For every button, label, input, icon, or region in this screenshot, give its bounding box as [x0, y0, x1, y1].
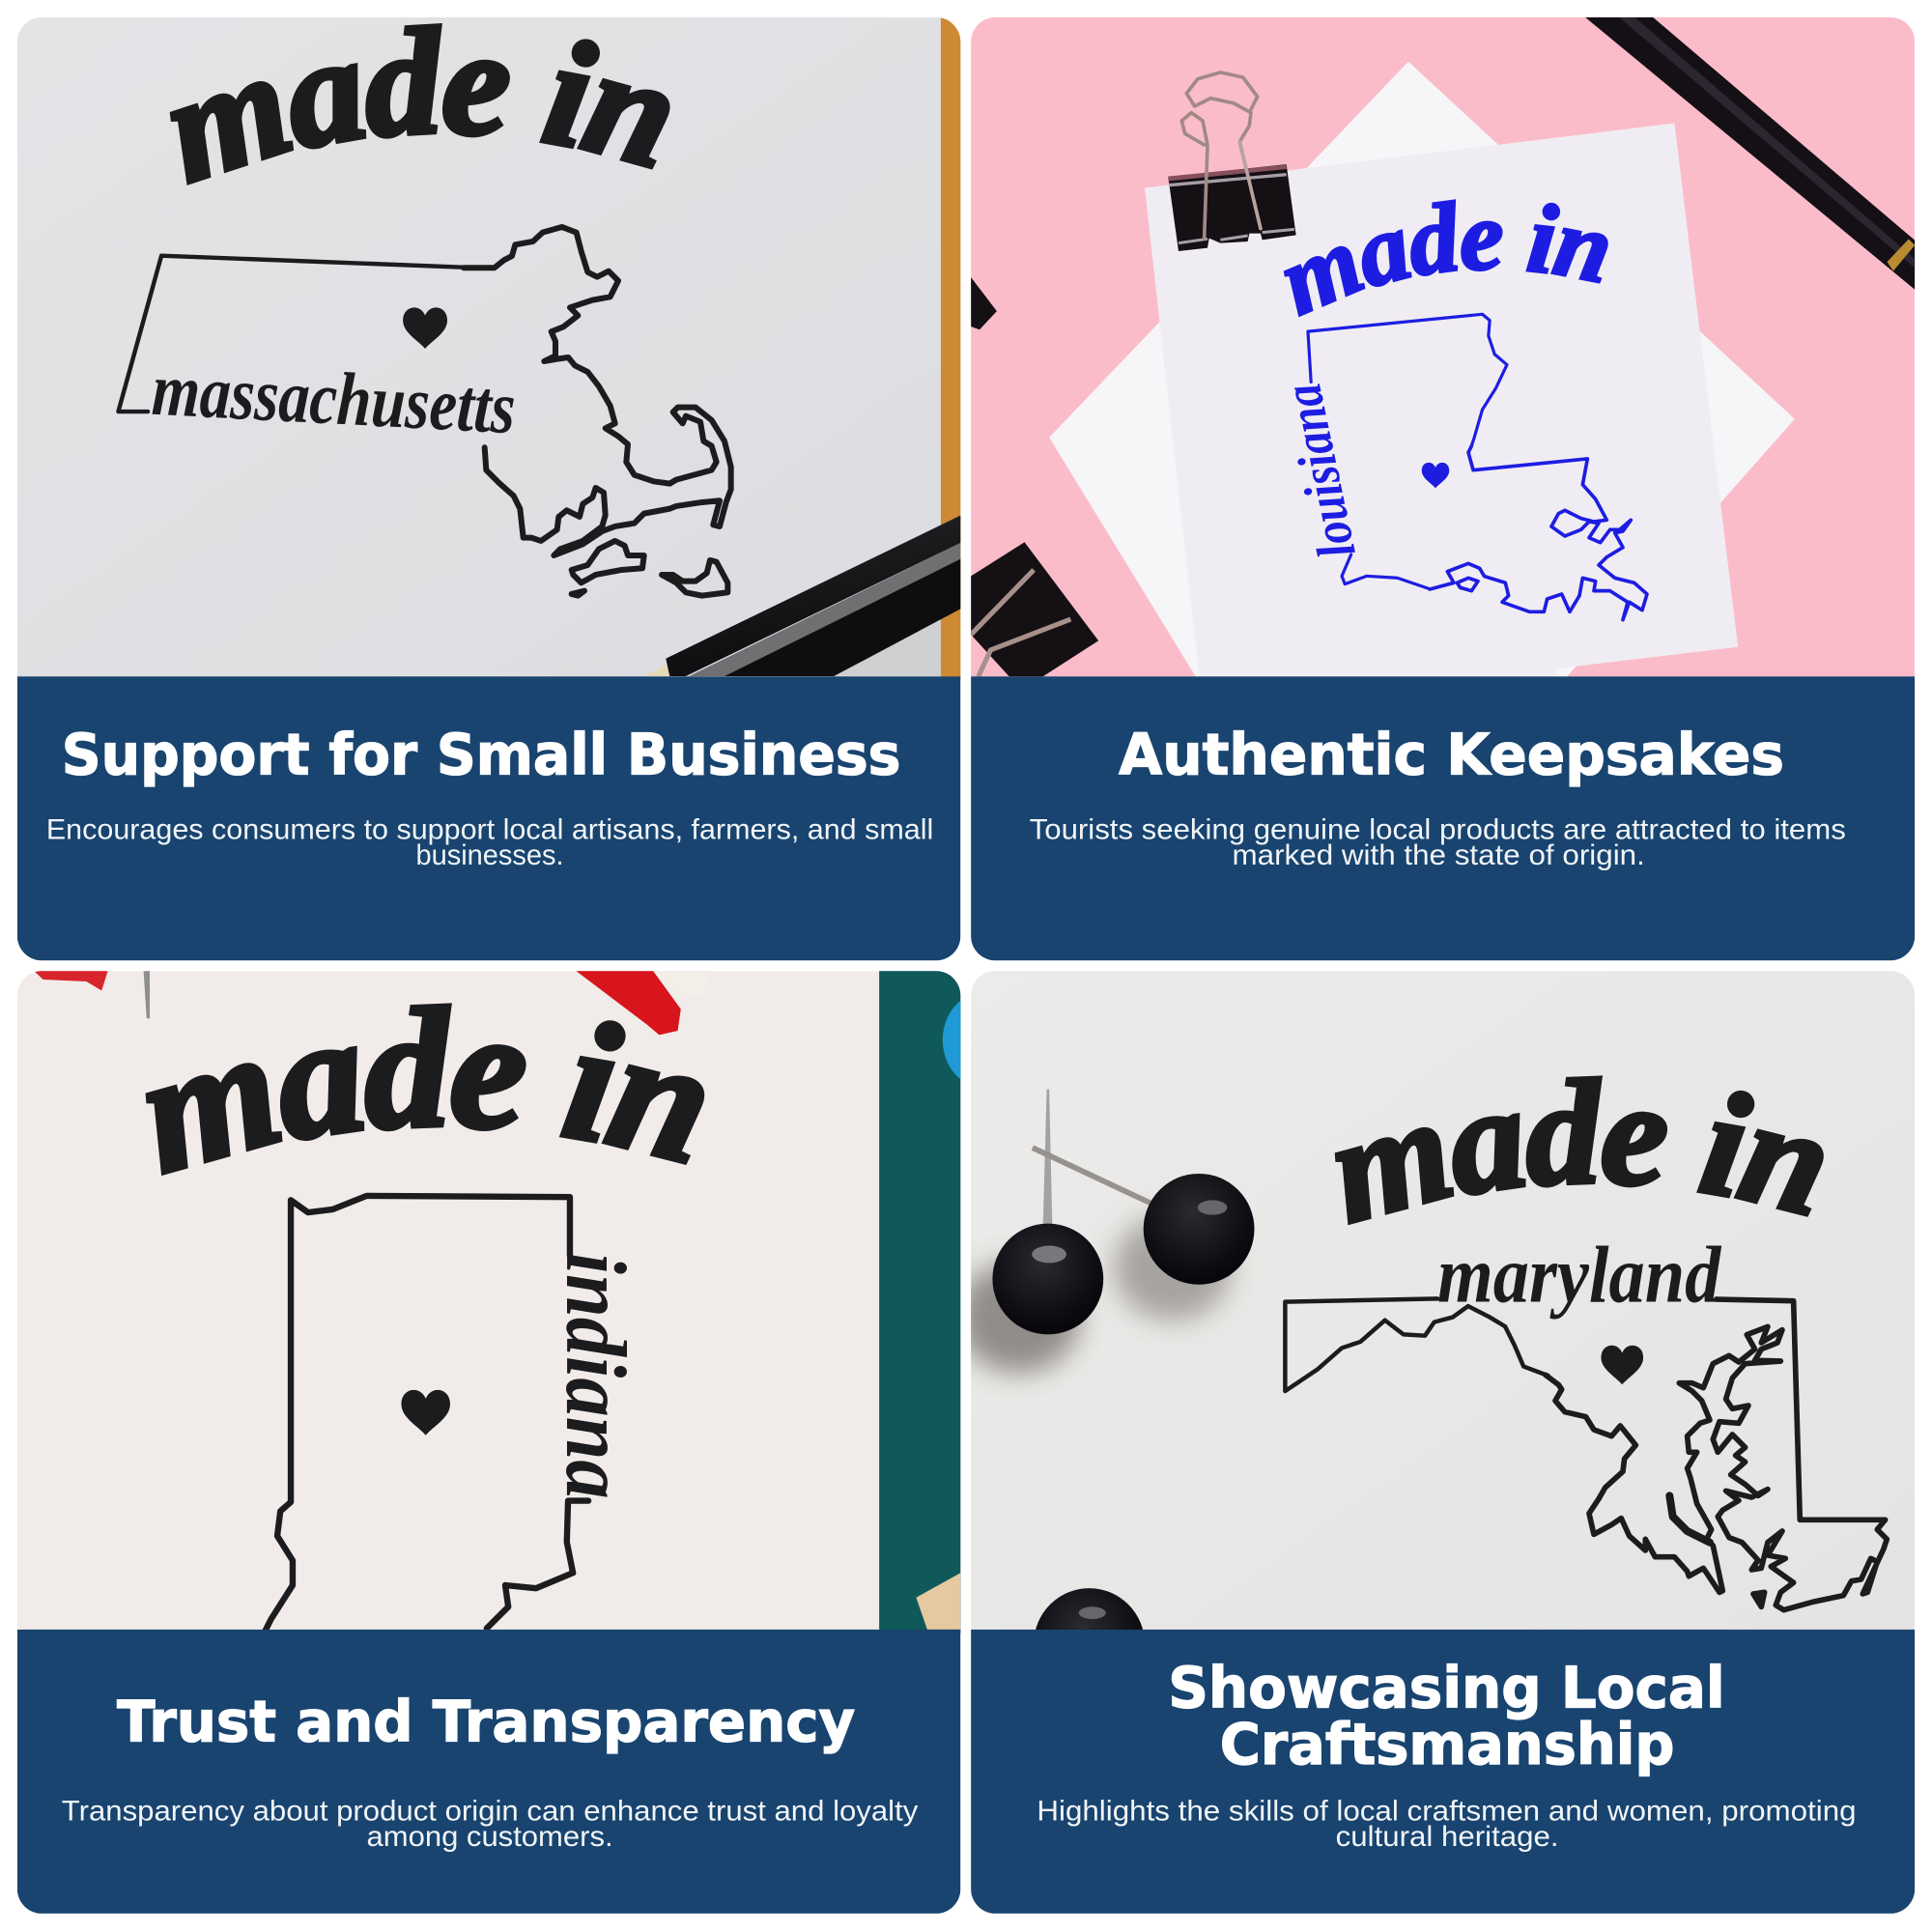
icon: heart: [1601, 1346, 1643, 1384]
description: Transparency about product origin can enhance trust and loyalty: [62, 1796, 919, 1828]
map: massachusetts outline: [118, 227, 731, 596]
heading: Authentic Keepsakes: [1119, 723, 1784, 788]
heading: Craftsmanship: [1220, 1712, 1674, 1777]
map: maryland outline: [1285, 1298, 1887, 1610]
panel: trust and transparency: [17, 971, 960, 1914]
icon: heart: [403, 307, 447, 349]
description: cultural heritage.: [1336, 1821, 1559, 1853]
description: Highlights the skills of local craftsmen and women, promoting: [1037, 1796, 1857, 1828]
heading: Showcasing Local: [1168, 1655, 1725, 1720]
heading: Trust and Transparency: [117, 1689, 855, 1754]
made in lettering: made in: [145, 1003, 705, 1177]
caption background: [17, 676, 960, 960]
panel: showcasing local craftsmanship: [971, 971, 1915, 1914]
made in lettering: made in: [1283, 199, 1608, 317]
photo: black push pins on white: [971, 971, 1915, 1630]
description: among customers.: [366, 1821, 613, 1853]
caption background: [971, 676, 1915, 960]
state name: massachusetts: massachusetts: [150, 348, 518, 449]
state name: maryland: maryland: [1437, 1231, 1722, 1321]
caption background: [971, 1630, 1915, 1914]
heading: Support for Small Business: [62, 723, 900, 788]
panel: support for small business: [17, 17, 960, 960]
photo: paper on desk with pens: [17, 17, 962, 689]
photo: papers, clips and pen on pink: [971, 17, 1915, 684]
icon: heart: [1422, 463, 1449, 488]
panel: authentic keepsakes: [971, 17, 1915, 960]
map: louisiana outline: [1308, 314, 1647, 620]
map: indiana outline: [265, 1196, 588, 1632]
caption background: [17, 1630, 960, 1914]
photo: paper with pins and marker on teal: [17, 971, 1019, 1634]
icon: heart: [401, 1390, 450, 1435]
description: Tourists seeking genuine local products are attracted to items: [1030, 814, 1846, 846]
description: Encourages consumers to support local artisans, farmers, and small: [46, 814, 933, 846]
description: marked with the state of origin.: [1233, 839, 1645, 871]
made in lettering: made in: [170, 23, 670, 185]
state name: indiana: indiana: [548, 1253, 643, 1499]
state name: louisiana: louisiana: [1272, 379, 1368, 563]
description: businesses.: [416, 839, 564, 871]
made in lettering: made in: [1335, 1075, 1824, 1225]
